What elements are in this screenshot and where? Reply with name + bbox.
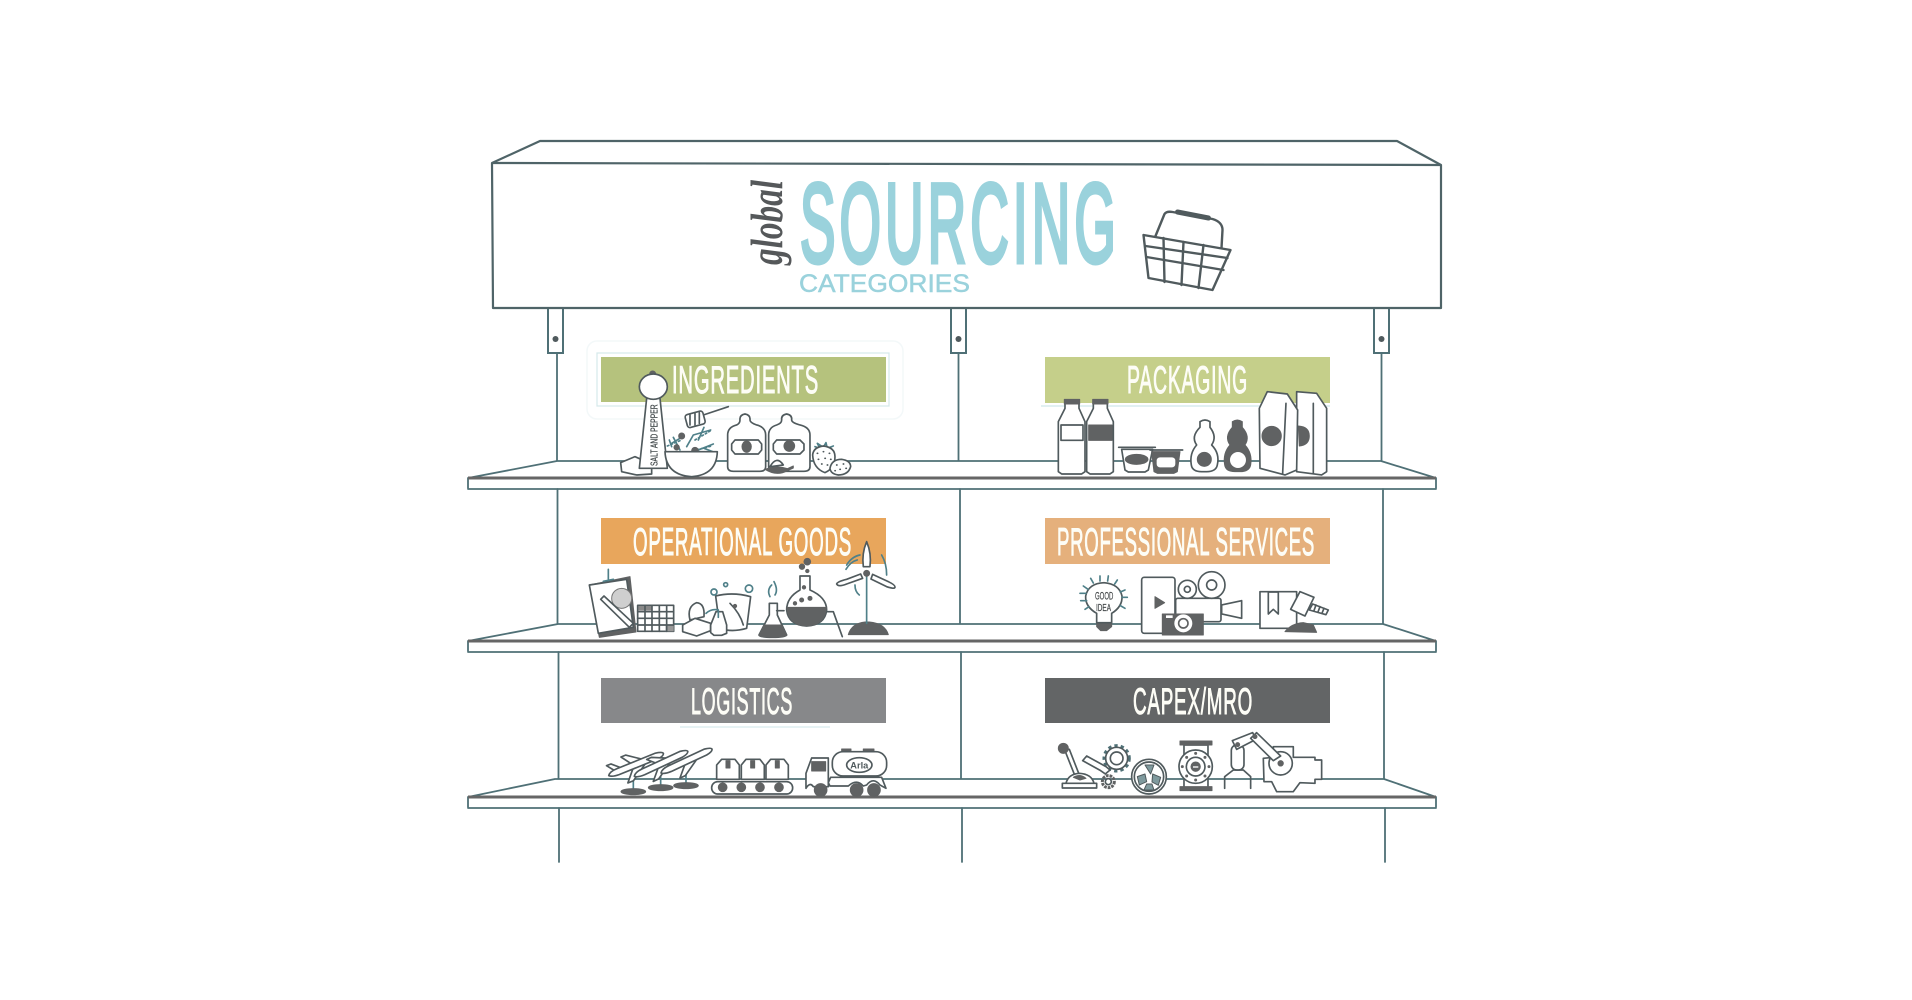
icons: packaging (1058, 392, 1327, 475)
icon: round flask (777, 558, 842, 637)
word: global: global (741, 180, 792, 266)
icon: honey dipper (685, 407, 728, 428)
icon: clipboard with magnifier (589, 569, 636, 637)
icon: conveyor with boxes (712, 759, 793, 794)
icon: salt and pepper mill: SALT AND PEPPER (649, 404, 660, 466)
label halo (587, 341, 903, 419)
panel: logistics (601, 678, 887, 796)
shelf 2 (468, 624, 1436, 652)
label: logistics (601, 678, 886, 727)
icon: calendar (638, 605, 674, 631)
icon: photo camera (1162, 614, 1203, 635)
icon: tissue box (683, 603, 711, 636)
icon: salt and pepper mill (639, 371, 667, 468)
icon: paper bag front (1259, 392, 1298, 475)
icon: valve (1179, 741, 1212, 791)
icon: paper bag back (1297, 392, 1327, 475)
icon: book and press (1260, 592, 1328, 632)
icon: model planes (604, 742, 717, 795)
icon: wheel (1132, 759, 1166, 794)
icon: phone with play (1142, 577, 1175, 633)
label: operational goods: OPERATIONAL GOODS (633, 521, 852, 564)
icon: spoon (765, 466, 793, 473)
icon: wind turbine (837, 542, 895, 635)
icon: cheese (621, 457, 652, 475)
awning sign: SOURCING (800, 161, 1120, 286)
icons: operational goods (589, 542, 895, 637)
label: capex/mro: CAPEX/MRO (1133, 681, 1253, 722)
icon: yogurt cup light (1119, 447, 1155, 472)
icon: squeeze bottle dark (1224, 420, 1251, 472)
icons: capex/mro (1058, 733, 1322, 794)
awning shape (492, 141, 1441, 308)
icon: tanker truck: Arla (850, 760, 869, 770)
subtitle: CATEGORIES: CATEGORIES (799, 270, 970, 298)
icon: bucket (711, 583, 753, 630)
label: professional services: PROFESSIONAL SERVICES (1057, 521, 1315, 564)
icon: yogurt cup dark (1150, 450, 1183, 473)
panel: professional services (1045, 518, 1330, 635)
icon: spray bottle (711, 612, 727, 635)
icon: bottle dark label (1087, 399, 1113, 474)
icon: bottle light label (1058, 399, 1085, 474)
brackets (548, 306, 1389, 353)
panel: ingredients (587, 341, 903, 477)
label: ingredients: INGREDIENTS (672, 359, 819, 402)
icon: lever (1058, 743, 1097, 788)
label: packaging (1041, 357, 1330, 406)
icon: basket (1144, 212, 1230, 290)
panel: capex/mro (1045, 678, 1330, 794)
label: capex/mro (1045, 678, 1330, 723)
label: packaging: PACKAGING (1127, 359, 1248, 402)
icon: small flask (759, 582, 787, 637)
icon: strawberries (813, 443, 851, 475)
icon: good idea bulb: IDEA (1096, 603, 1111, 614)
icon: video camera (1176, 572, 1242, 622)
icon: pump (1263, 747, 1322, 792)
icons: professional services (1080, 572, 1328, 635)
shelf 1 (468, 461, 1436, 489)
label: professional services (1045, 518, 1330, 564)
label: ingredients (597, 353, 889, 406)
icons: logistics (604, 742, 887, 796)
icon: robot arm (1225, 733, 1281, 788)
icons: ingredients (621, 371, 851, 477)
label: operational goods (601, 518, 886, 564)
wall posts (557, 353, 1385, 862)
panel: packaging (1041, 357, 1330, 475)
icon: jar right (769, 414, 810, 471)
icon: squeeze bottle light (1191, 420, 1218, 472)
icon: jar left (728, 414, 766, 471)
icon: good idea bulb: GOOD (1095, 590, 1113, 602)
icon: salad bowl (665, 427, 717, 477)
awning sign (492, 141, 1441, 308)
panel: operational goods (589, 518, 895, 637)
label: logistics: LOGISTICS (691, 681, 793, 722)
shelf 3 (468, 779, 1436, 808)
icon: gears and wrench (1083, 746, 1129, 788)
icon: good idea bulb (1080, 576, 1127, 631)
icon: tanker truck (806, 749, 887, 796)
